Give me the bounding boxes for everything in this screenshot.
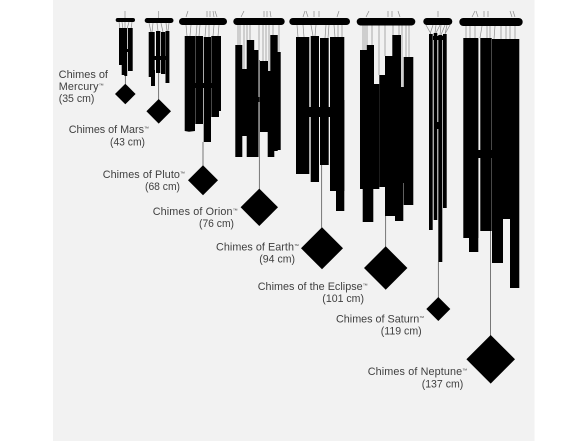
strings: Mars [149, 11, 169, 32]
tubes: Mercury [119, 28, 133, 76]
tubes: Mars [149, 31, 169, 86]
weight: Mercury [115, 84, 136, 104]
label: Eclipse: Chimes of the Eclipse [258, 281, 363, 293]
weight: Neptune [466, 335, 515, 384]
tubes: Pluto [185, 36, 221, 142]
clapper line: Earth [321, 165, 323, 228]
tubes: Orion [235, 35, 281, 157]
strings: Eclipse [363, 11, 409, 87]
chime: Orion [233, 11, 285, 226]
clapper line: Pluto [202, 142, 204, 166]
label: Saturn: Chimes of Saturn [336, 313, 419, 325]
label: Saturn [336, 313, 424, 338]
strings: Pluto [186, 11, 219, 37]
clapper line: Neptune [490, 231, 492, 336]
label: Mercury: ™ [99, 83, 104, 89]
label: Neptune: (137 cm) [422, 378, 463, 390]
weight: Eclipse [364, 246, 407, 290]
label: Mars [69, 124, 149, 149]
chime: Neptune [459, 11, 523, 384]
clapper line: Orion [258, 60, 260, 190]
label: Mercury: Chimes of [59, 69, 109, 81]
label: Neptune: Chimes of Neptune [368, 366, 462, 378]
label: Neptune [368, 366, 467, 390]
clapper line: Saturn [437, 262, 439, 298]
clapper line: Mercury [124, 76, 126, 86]
label: Pluto: ™ [180, 171, 185, 177]
chime: Mercury [115, 11, 136, 104]
hanging bar: Mercury [116, 18, 135, 22]
tubes: Eclipse [360, 35, 413, 222]
clapper line: Mars [158, 73, 160, 100]
label: Pluto: (68 cm) [145, 181, 180, 193]
label: Pluto [103, 169, 185, 193]
strings: Earth [297, 11, 342, 38]
weight: Pluto [188, 165, 218, 195]
hanging bar: Pluto [179, 18, 227, 25]
chime: Mars [145, 11, 174, 124]
label: Orion: Chimes of Orion [153, 206, 233, 218]
label: Mars: Chimes of Mars [69, 124, 144, 136]
strings: Saturn [426, 11, 450, 35]
label: Mars: (43 cm) [110, 137, 145, 149]
hanging bar: Saturn [423, 18, 452, 25]
hanging bar: Mars [145, 18, 174, 23]
tubes: Saturn [429, 33, 447, 262]
tubes: Earth [296, 36, 344, 211]
chime: Pluto [179, 11, 227, 195]
hanging bar: Orion [233, 18, 285, 25]
weight: Mars [146, 99, 171, 124]
hanging bar: Neptune [459, 18, 523, 26]
label: Orion: ™ [233, 208, 238, 214]
label: Earth [216, 242, 299, 266]
label: Mercury: (35 cm) [59, 93, 94, 105]
hanging bar: Earth [289, 18, 350, 25]
label: Mercury: Mercury [59, 81, 99, 93]
label: Orion [153, 206, 238, 230]
weight: Earth [301, 227, 343, 269]
label: Saturn: (119 cm) [381, 326, 422, 338]
weight: Orion [241, 189, 278, 226]
label: Eclipse: (101 cm) [322, 293, 364, 305]
label: Earth: Chimes of Earth [216, 242, 294, 254]
chime: Eclipse [357, 11, 415, 290]
strings: Orion [238, 11, 279, 71]
chime: Earth [289, 11, 350, 269]
label: Orion: (76 cm) [199, 218, 234, 230]
label: Mercury [59, 69, 109, 105]
chime: Saturn [423, 11, 452, 321]
label: Eclipse: ™ [363, 283, 368, 289]
tubes: Neptune [463, 38, 519, 288]
label: Neptune: ™ [462, 368, 467, 374]
label: Saturn: ™ [419, 315, 424, 321]
clapper line: Eclipse [385, 216, 387, 247]
label: Pluto: Chimes of Pluto [103, 169, 180, 181]
hanging bar: Eclipse [357, 18, 415, 26]
strings: Neptune [466, 11, 515, 39]
label: Mars: ™ [144, 126, 149, 132]
label: Earth: ™ [294, 244, 299, 250]
label: Earth: (94 cm) [259, 254, 295, 266]
weight: Saturn [426, 297, 450, 321]
label: Eclipse [258, 281, 368, 305]
strings: Mercury [119, 11, 132, 29]
